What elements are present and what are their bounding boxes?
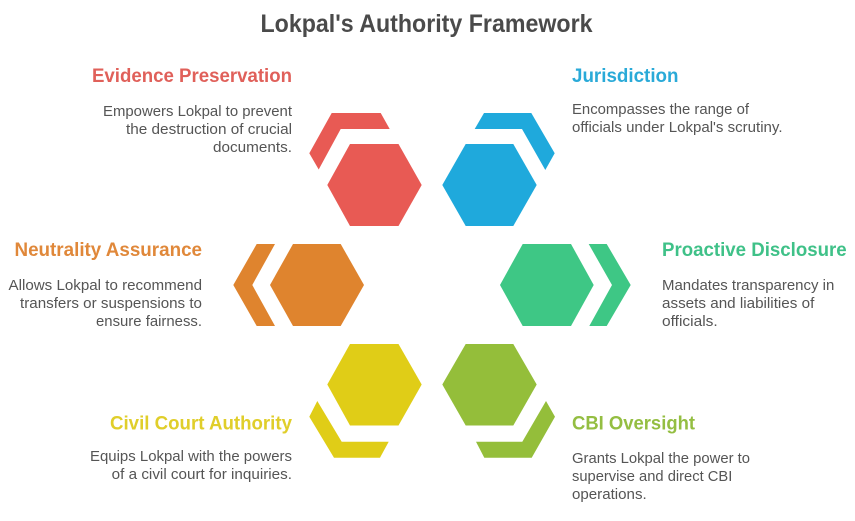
title: Lokpal's Authority Framework — [260, 10, 593, 38]
text: neutrality assurance description — [8, 278, 202, 330]
heading: jurisdiction: Jurisdiction — [572, 66, 678, 87]
heading: neutrality assurance: Neutrality Assurance — [14, 240, 202, 261]
panel: jurisdiction — [442, 66, 782, 226]
icon: orange hexagon with chevron — [233, 244, 364, 326]
heading: civil court authority: Civil Court Authority — [110, 414, 292, 434]
icon: lime hexagon with chevron — [442, 344, 555, 458]
text: evidence preservation description: the destruction of crucial — [126, 122, 292, 138]
icon: green hexagon with chevron — [500, 244, 631, 326]
text: cbi oversight description: operations. — [572, 487, 647, 503]
text: jurisdiction description: Encompasses the range of — [572, 102, 750, 118]
heading: cbi oversight: CBI Oversight — [572, 414, 696, 434]
text: proactive disclosure description: assets and liabilities of — [662, 296, 815, 312]
text: neutrality assurance description: Allows Lokpal to recommend — [8, 278, 202, 294]
text: proactive disclosure description: officials. — [662, 314, 718, 330]
text: proactive disclosure description — [662, 278, 834, 330]
text: jurisdiction description — [572, 102, 782, 136]
panel: civil court authority — [90, 344, 422, 483]
panel: cbi oversight — [442, 344, 750, 503]
text: evidence preservation description: documents. — [213, 140, 292, 156]
text: cbi oversight description: supervise and direct CBI — [572, 469, 732, 485]
icon: red hexagon with chevron — [309, 113, 422, 226]
text: cbi oversight description: Grants Lokpal the power to — [572, 451, 750, 467]
heading: evidence preservation: Evidence Preservation — [92, 66, 292, 87]
text: neutrality assurance description: transfers or suspensions to — [20, 296, 202, 312]
text: civil court authority description — [90, 449, 292, 483]
text: civil court authority description: Equips Lokpal with the powers — [90, 449, 292, 465]
panel: neutrality assurance — [8, 240, 364, 330]
text: jurisdiction description: officials under Lokpal's scrutiny. — [572, 120, 782, 136]
icon: yellow hexagon with chevron — [309, 344, 422, 458]
heading: proactive disclosure: Proactive Disclosure — [662, 240, 847, 261]
text: civil court authority description: of a civil court for inquiries. — [112, 467, 292, 483]
text: cbi oversight description — [572, 451, 750, 503]
text: evidence preservation description — [103, 104, 292, 156]
text: proactive disclosure description: Mandates transparency in — [662, 278, 834, 294]
panel: proactive disclosure — [500, 240, 847, 330]
icon: blue hexagon with chevron — [442, 113, 555, 226]
text: evidence preservation description: Empowers Lokpal to prevent — [103, 104, 292, 120]
panel: evidence preservation — [92, 66, 422, 226]
text: neutrality assurance description: ensure fairness. — [96, 314, 202, 330]
